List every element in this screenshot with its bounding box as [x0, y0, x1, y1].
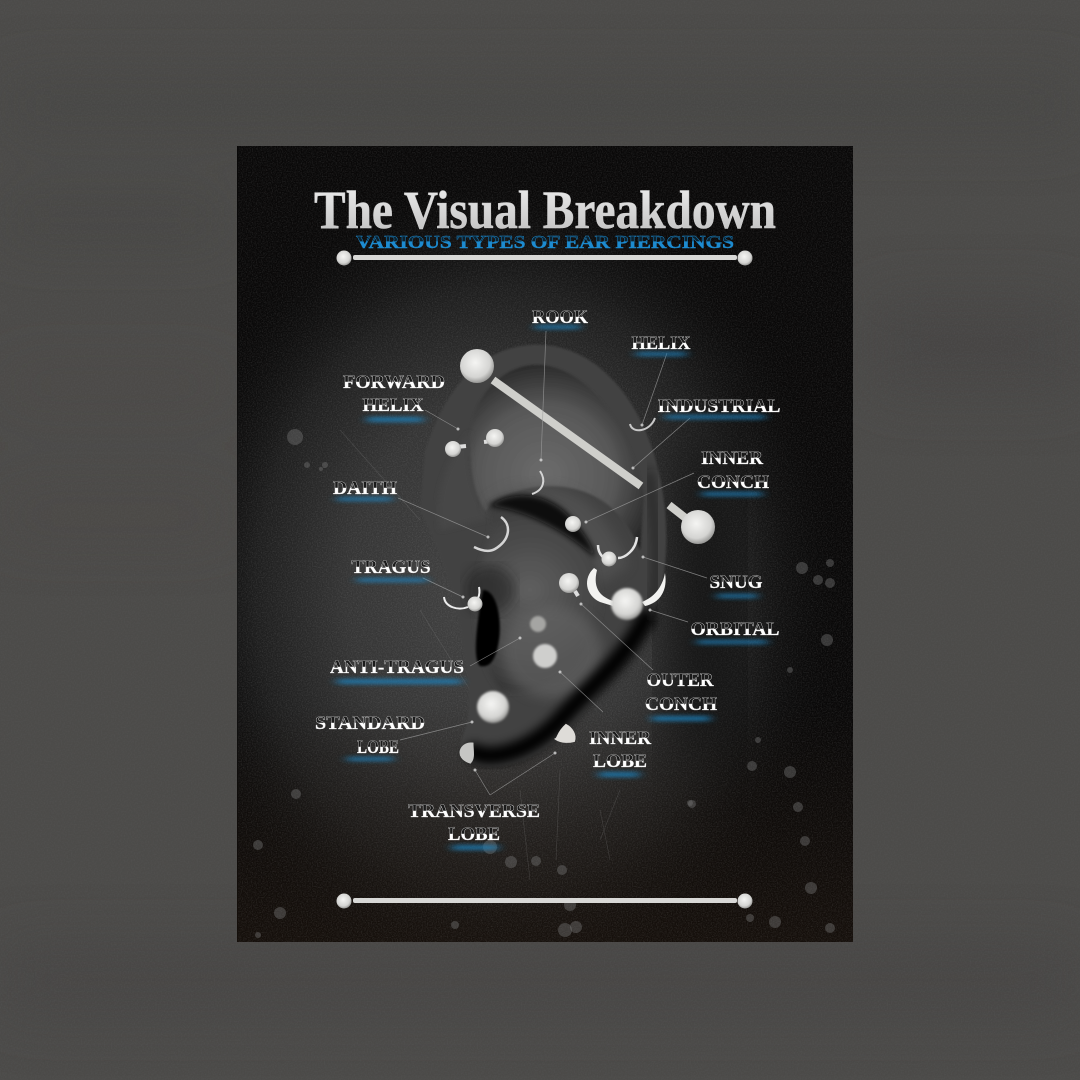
ear body — [420, 345, 666, 767]
label: tragus: TRAGUS — [352, 557, 430, 578]
tragus jewelry — [444, 587, 482, 612]
label: standard lobe: LOBE — [357, 737, 399, 758]
concha upper shadow — [489, 496, 596, 558]
label: outer conch — [645, 670, 717, 715]
anti-tragus and conch studs — [530, 616, 557, 668]
scratches — [340, 345, 620, 880]
standard lobe ball — [477, 691, 509, 723]
label: inner conch: INNER — [701, 448, 763, 469]
bottom barbell divider — [336, 894, 752, 908]
label: forward helix — [343, 372, 445, 416]
label: industrial: INDUSTRIAL — [658, 396, 780, 417]
title: The Visual Breakdown — [314, 180, 776, 240]
blue label smudges — [337, 325, 767, 850]
forward helix jewelry — [445, 429, 504, 457]
ear illustration — [420, 345, 730, 770]
helix ring — [630, 418, 655, 430]
helix inner cavity — [470, 365, 644, 550]
industrial bar — [460, 349, 715, 544]
tragus dark area — [465, 566, 515, 614]
label: standard lobe — [315, 713, 425, 758]
transverse jewelry — [461, 725, 575, 762]
label: transverse lobe: TRANSVERSE — [408, 801, 540, 822]
label: inner lobe: INNER — [589, 728, 651, 749]
label: inner conch: CONCH — [697, 472, 769, 493]
label: outer conch: OUTER — [646, 670, 714, 691]
label: orbital: ORBITAL — [690, 619, 780, 640]
left side of ear — [438, 432, 490, 530]
label: inner conch — [697, 448, 769, 493]
label: inner lobe: LOBE — [593, 751, 647, 772]
label: outer conch: CONCH — [645, 694, 717, 715]
label: forward helix: HELIX — [362, 395, 424, 416]
top barbell divider — [336, 250, 752, 266]
label: helix: HELIX — [632, 333, 691, 354]
poster — [237, 146, 853, 942]
helix rim shade — [648, 470, 657, 620]
rook ring — [532, 471, 543, 494]
label: anti-tragus: ANTI-TRAGUS — [330, 657, 464, 678]
antitragus lit area — [502, 606, 602, 698]
daith ring — [474, 517, 508, 551]
label: rook: ROOK — [532, 307, 588, 328]
label: daith: DAITH — [333, 478, 397, 499]
inner conch ball — [565, 516, 581, 532]
lobe edge shadow — [474, 618, 646, 756]
label: transverse lobe — [408, 801, 540, 845]
orbital jewelry — [559, 568, 666, 620]
label: inner lobe — [589, 728, 651, 772]
label: standard lobe: STANDARD — [315, 713, 425, 734]
label: snug: SNUG — [710, 572, 763, 593]
concha — [476, 494, 600, 692]
ear shadow on head — [670, 430, 730, 770]
label: forward helix: FORWARD — [343, 372, 445, 393]
label: transverse lobe: LOBE — [448, 824, 500, 845]
antihelix fold — [486, 485, 628, 585]
snug jewelry — [598, 537, 637, 566]
pointer lines — [398, 331, 707, 795]
ear canal — [476, 590, 500, 666]
subtitle: VARIOUS TYPES OF EAR PIERCINGS — [356, 232, 734, 252]
paint splatter — [253, 429, 835, 938]
